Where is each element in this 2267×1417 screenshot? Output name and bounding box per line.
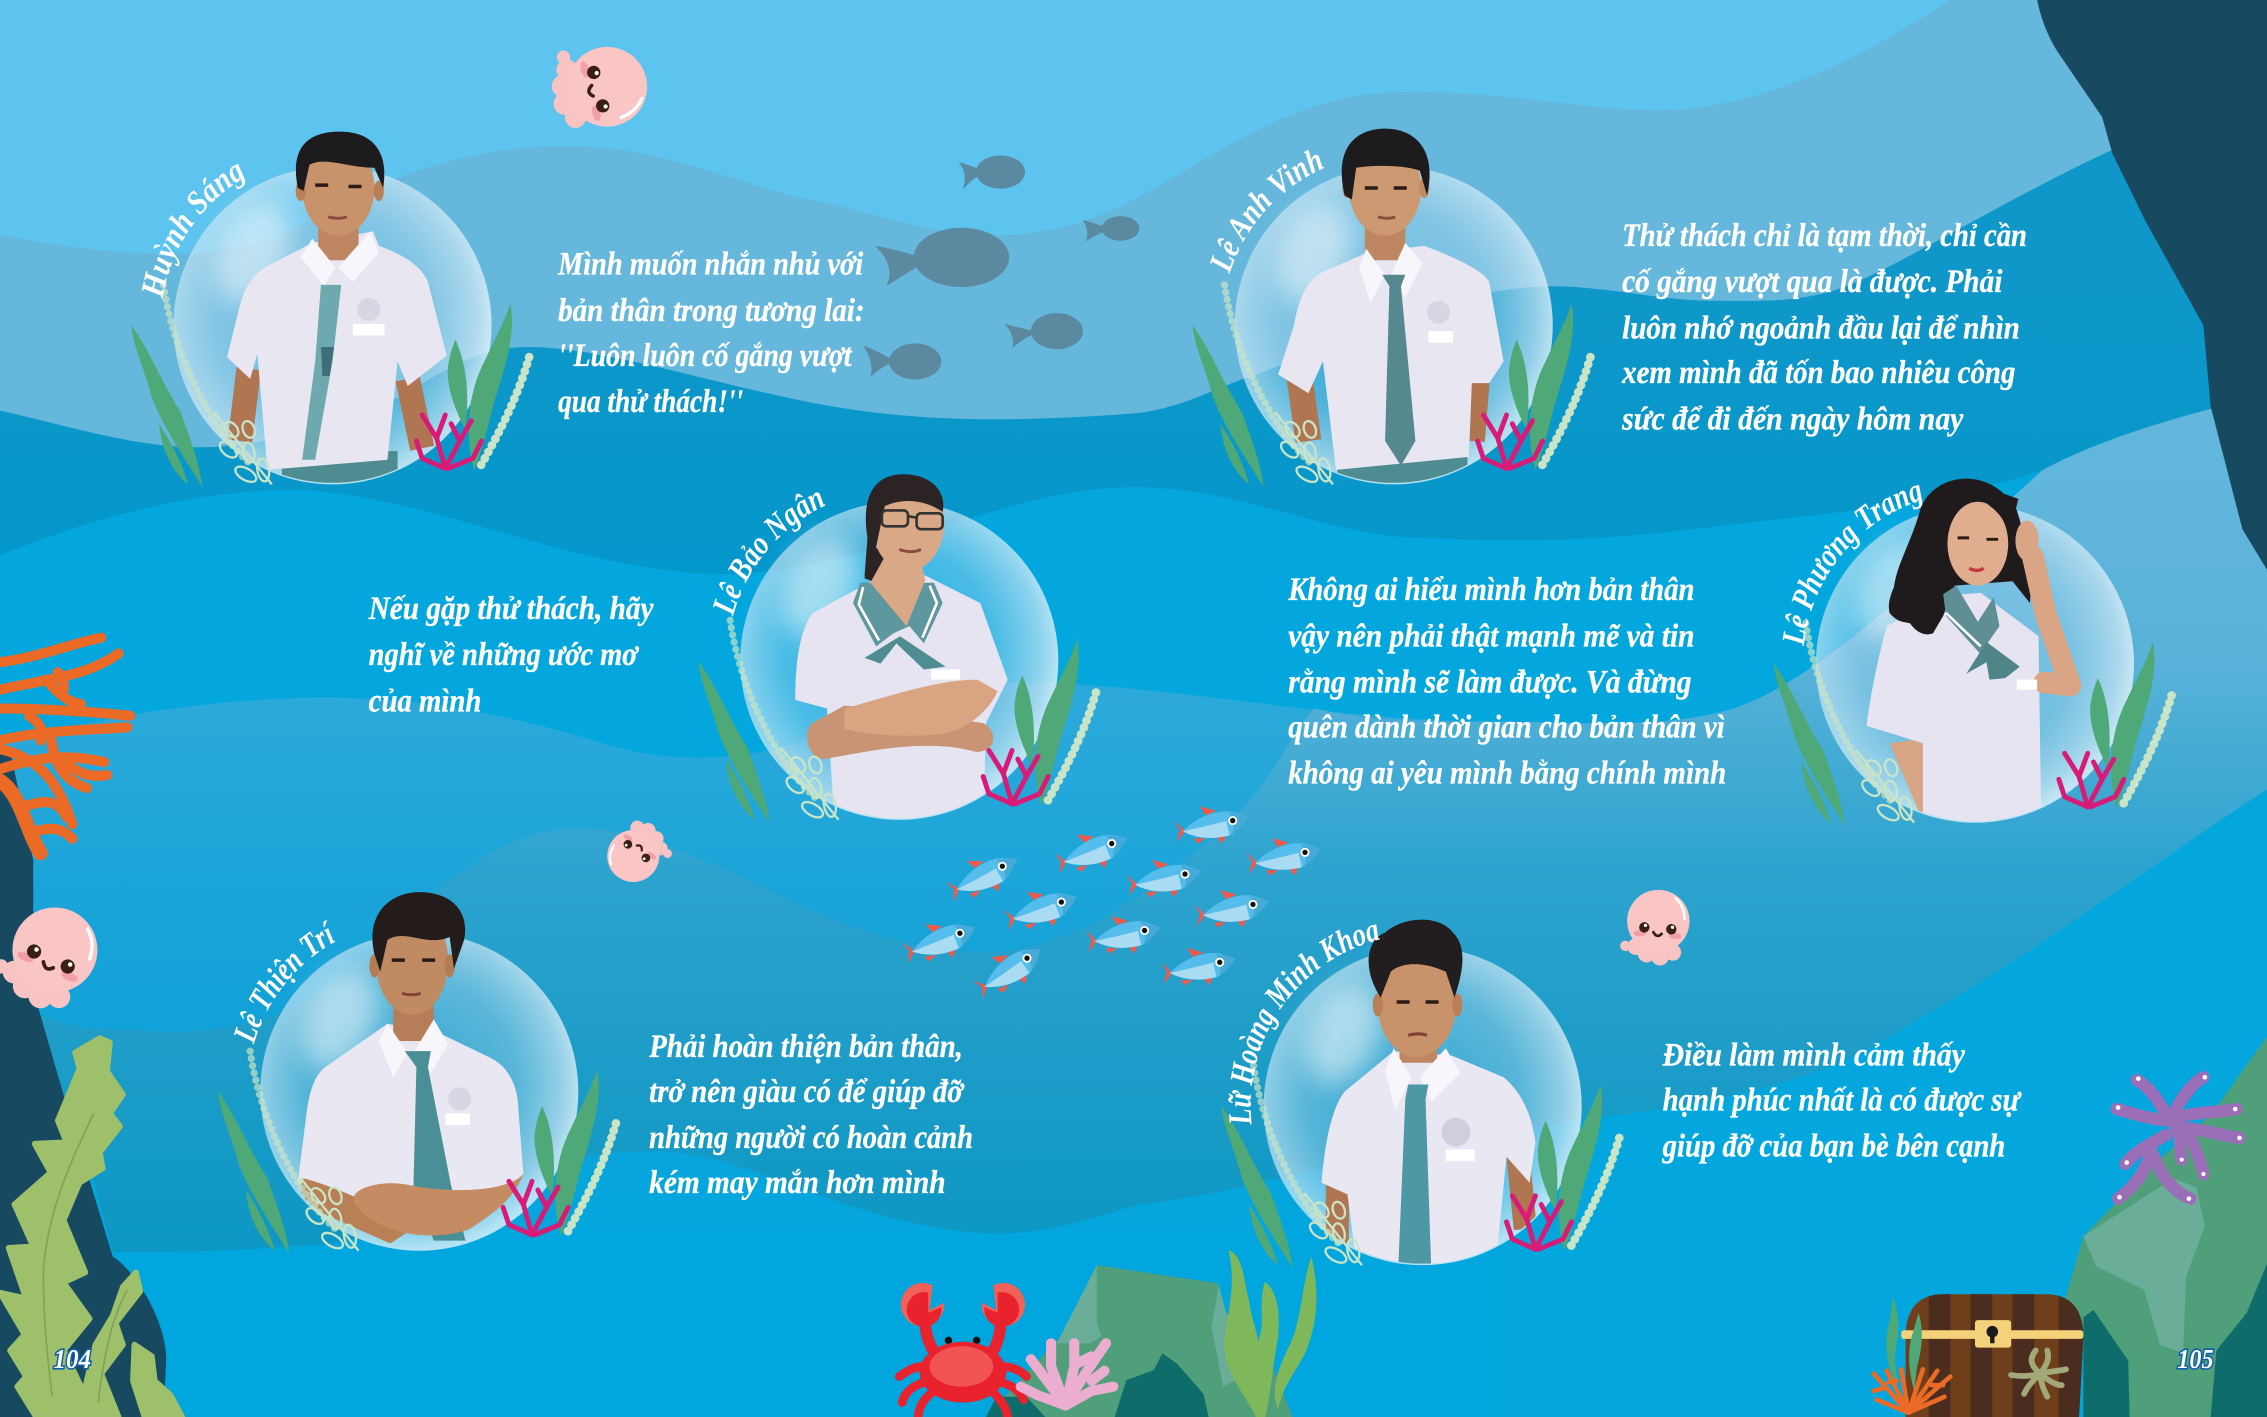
jellyfish right	[1619, 887, 1692, 967]
panel: Lê Anh Vinh	[1192, 128, 1595, 487]
text: Lê Anh Vinh quote	[1621, 217, 2027, 437]
name: Lữ Hoàng Minh Khoa: Lữ Hoàng Minh Khoa	[1228, 924, 1380, 1124]
panel: Lê Bảo Ngân	[698, 474, 1100, 822]
text: Lê Phương Trang quote: vậy nên phải thật mạnh mẽ và tin	[1288, 617, 1694, 654]
name: Lê Phương Trang: Lê Phương Trang	[1782, 485, 1922, 646]
background wave: pale teal band	[36, 390, 2267, 1252]
text: Lê Bảo Ngân quote	[368, 590, 654, 719]
right dark cliff	[2037, 0, 2267, 570]
name: Huỳnh Sáng: Huỳnh Sáng	[142, 164, 246, 299]
page number 105: 105	[2177, 1344, 2214, 1374]
text: Lữ Hoàng Minh Khoa quote: giúp đỡ của bạn bè bên cạnh	[1662, 1128, 2005, 1165]
page number 104: 104	[53, 1344, 91, 1374]
text: Lê Anh Vinh quote: sức để đi đến ngày hôm nay	[1621, 400, 1964, 437]
text: Lê Anh Vinh quote: Thử thách chỉ là tạm thời, chỉ cần	[1622, 217, 2027, 254]
text: Lê Thiện Trí quote: những người có hoàn cảnh	[649, 1119, 973, 1156]
name: Lê Bảo Ngân: Lê Bảo Ngân	[712, 492, 826, 616]
left lime seaweed	[0, 1038, 182, 1417]
text: Lê Bảo Ngân quote: Nếu gặp thử thách, hãy	[368, 590, 654, 627]
panel: Lê Phương Trang	[1774, 478, 2176, 826]
text: Lê Anh Vinh quote: luôn nhớ ngoảnh đầu lại để nhìn	[1622, 309, 2020, 346]
purple sea creature	[2116, 1075, 2242, 1201]
text: Huỳnh Sáng quote: ''Luôn luôn cố gắng vượt	[558, 337, 853, 374]
pink coral	[1021, 1343, 1113, 1405]
text: Lê Thiện Trí quote: trở nên giàu có để giúp đỡ	[649, 1073, 965, 1110]
jellyfish top	[541, 31, 656, 140]
background wave: light layer left	[0, 683, 1495, 1417]
text: Lê Phương Trang quote: quên dành thời gian cho bản thân vì	[1288, 708, 1725, 745]
text: Lê Anh Vinh quote: xem mình đã tốn bao nhiêu công	[1621, 354, 2015, 391]
treasure chest	[1874, 1291, 2088, 1417]
text: Huỳnh Sáng quote: Mình muốn nhắn nhủ với	[557, 246, 864, 283]
panel: Lữ Hoàng Minh Khoa	[1222, 920, 1624, 1268]
panel: Lê Thiện Trí	[218, 892, 620, 1254]
left dark cliff	[0, 746, 166, 1417]
text: Huỳnh Sáng quote: qua thử thách!''	[558, 383, 743, 420]
text: Lê Thiện Trí quote: kém may mắn hơn mình	[649, 1164, 946, 1201]
orange coral, left	[0, 638, 130, 853]
text: Lê Bảo Ngân quote: của mình	[369, 682, 481, 719]
coral and seaweed beside chest	[1874, 1297, 1950, 1413]
right rock	[2065, 1037, 2267, 1417]
centre rock	[986, 1265, 1293, 1417]
text: Lữ Hoàng Minh Khoa quote	[1662, 1037, 2022, 1165]
school of small fish	[899, 804, 1322, 1003]
text: Lê Anh Vinh quote: cố gắng vượt qua là được. Phải	[1622, 263, 2003, 300]
crab	[899, 1283, 1027, 1417]
centre seaweed	[1224, 1250, 1316, 1417]
text: Lữ Hoàng Minh Khoa quote: Điều làm mình cảm thấy	[1662, 1037, 1965, 1074]
panel: Huỳnh Sáng	[132, 132, 534, 487]
text: Huỳnh Sáng quote	[557, 246, 865, 420]
text: Lê Phương Trang quote	[1287, 571, 1726, 792]
text: Lữ Hoàng Minh Khoa quote: hạnh phúc nhất là có được sự	[1663, 1081, 2022, 1118]
text: Lê Thiện Trí quote	[648, 1028, 973, 1201]
text: Lê Thiện Trí quote: Phải hoàn thiện bản thân,	[648, 1028, 963, 1065]
name: Lê Anh Vinh: Lê Anh Vinh	[1210, 150, 1324, 274]
name: Lê Thiện Trí: Lê Thiện Trí	[234, 920, 336, 1044]
text: Lê Phương Trang quote: Không ai hiểu mình hơn bản thân	[1287, 571, 1694, 608]
text: Huỳnh Sáng quote: bản thân trong tương lai:	[558, 292, 865, 329]
jellyfish centre	[597, 811, 680, 895]
silhouette fish group	[863, 155, 1139, 380]
jellyfish left	[0, 891, 111, 1022]
text: Lê Bảo Ngân quote: nghĩ về những ước mơ	[369, 636, 639, 673]
text: Lê Phương Trang quote: rằng mình sẽ làm được. Và đừng	[1288, 664, 1692, 701]
text: Lê Phương Trang quote: không ai yêu mình bằng chính mình	[1288, 755, 1726, 792]
background wave: bright blue layer	[0, 434, 2267, 1417]
